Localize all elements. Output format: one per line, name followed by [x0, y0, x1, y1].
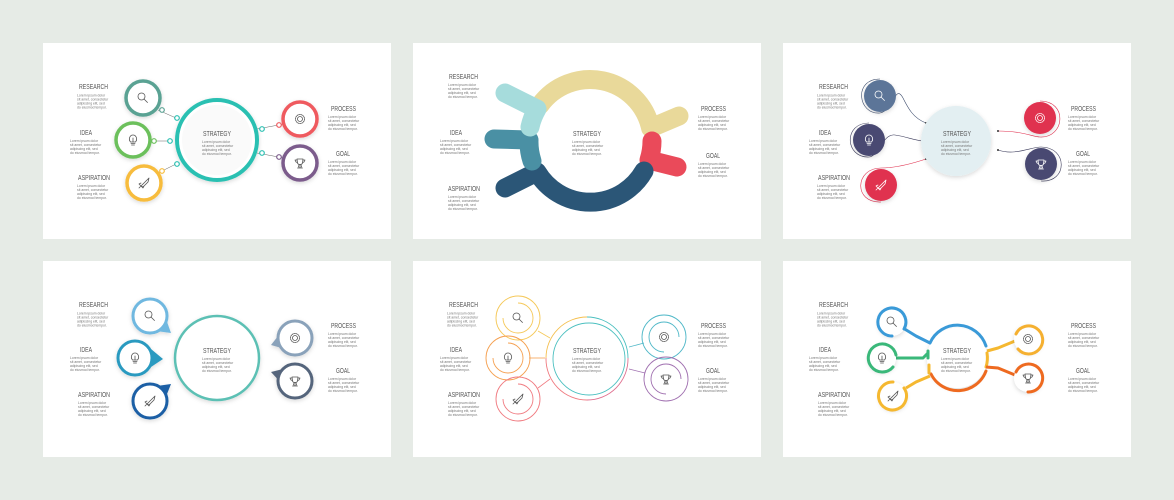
text labels: do eiusmod tempor. [328, 172, 358, 176]
text labels: adipiscing elit, sed [698, 340, 726, 344]
text labels [809, 82, 1100, 200]
text labels: ASPIRATION [78, 390, 110, 399]
text labels: sit amet, consectetur [818, 405, 850, 409]
text labels: Lorem ipsum dolor [809, 356, 838, 360]
text labels: Lorem ipsum dolor [1068, 115, 1097, 119]
text labels: Lorem ipsum dolor [1068, 332, 1097, 336]
text labels: sit amet, consectetur [328, 381, 360, 385]
text labels: Lorem ipsum dolor [77, 312, 106, 316]
text labels: GOAL [1076, 366, 1090, 375]
curved arrows [850, 79, 1061, 202]
text labels: sit amet, consectetur [817, 98, 849, 102]
text labels: sit amet, consectetur [698, 166, 730, 170]
text labels: sit amet, consectetur [70, 143, 102, 147]
text labels: do eiusmod tempor. [1068, 389, 1098, 393]
text labels: IDEA [80, 128, 92, 137]
text labels: adipiscing elit, sed [817, 102, 845, 106]
text labels: sit amet, consectetur [202, 144, 234, 148]
text labels: do eiusmod tempor. [70, 368, 100, 372]
text labels [70, 300, 360, 417]
text labels: adipiscing elit, sed [202, 365, 230, 369]
text labels: IDEA [80, 345, 92, 354]
text labels: sit amet, consectetur [941, 361, 973, 365]
pin nodes [118, 299, 312, 418]
text labels: do eiusmod tempor. [941, 369, 971, 373]
text labels: do eiusmod tempor. [328, 127, 358, 131]
text labels: Lorem ipsum dolor [77, 94, 106, 98]
text labels: adipiscing elit, sed [448, 203, 476, 207]
text labels: RESEARCH [79, 300, 108, 309]
text labels: Lorem ipsum dolor [698, 377, 727, 381]
text labels: STRATEGY [943, 346, 971, 355]
text labels: sit amet, consectetur [202, 361, 234, 365]
center circle strategy [175, 316, 259, 400]
text labels: Lorem ipsum dolor [818, 401, 847, 405]
panel: variant 3 filled circles with arrows [783, 43, 1131, 239]
text labels: RESEARCH [449, 72, 478, 81]
text labels: do eiusmod tempor. [698, 344, 728, 348]
text labels: do eiusmod tempor. [698, 174, 728, 178]
text labels: Lorem ipsum dolor [817, 94, 846, 98]
text labels: adipiscing elit, sed [440, 147, 468, 151]
text labels: Lorem ipsum dolor [328, 115, 357, 119]
text labels: adipiscing elit, sed [77, 192, 105, 196]
text labels: sit amet, consectetur [70, 360, 102, 364]
text labels: Lorem ipsum dolor [698, 332, 727, 336]
text labels [70, 82, 360, 200]
text labels [440, 300, 730, 417]
text labels: do eiusmod tempor. [809, 368, 839, 372]
text labels: ASPIRATION [818, 173, 850, 182]
text labels: adipiscing elit, sed [572, 365, 600, 369]
text labels: Lorem ipsum dolor [440, 356, 469, 360]
text labels: PROCESS [701, 321, 726, 330]
text labels: Lorem ipsum dolor [328, 160, 357, 164]
text labels: do eiusmod tempor. [1068, 172, 1098, 176]
text labels: do eiusmod tempor. [78, 413, 108, 417]
icons [878, 317, 1033, 401]
text labels: sit amet, consectetur [809, 143, 841, 147]
text labels: GOAL [336, 366, 350, 375]
text labels: adipiscing elit, sed [70, 147, 98, 151]
text labels: sit amet, consectetur [328, 336, 360, 340]
text labels: sit amet, consectetur [440, 143, 472, 147]
text labels: adipiscing elit, sed [941, 148, 969, 152]
text labels: Lorem ipsum dolor [328, 377, 357, 381]
text labels: sit amet, consectetur [448, 87, 480, 91]
text labels: adipiscing elit, sed [1068, 385, 1096, 389]
node circles [116, 81, 317, 200]
icons [131, 311, 300, 406]
text labels: adipiscing elit, sed [447, 320, 475, 324]
panel: variant 4 pin circles [43, 261, 391, 457]
text labels: sit amet, consectetur [78, 405, 110, 409]
text labels: ASPIRATION [818, 390, 850, 399]
text labels: do eiusmod tempor. [572, 369, 602, 373]
text labels: Lorem ipsum dolor [77, 184, 106, 188]
text labels: do eiusmod tempor. [698, 389, 728, 393]
text labels: adipiscing elit, sed [1068, 340, 1096, 344]
panel: variant 2 segmented ring [413, 43, 761, 239]
text labels: Lorem ipsum dolor [70, 139, 99, 143]
text labels: IDEA [450, 128, 462, 137]
text labels: sit amet, consectetur [941, 144, 973, 148]
text labels: do eiusmod tempor. [440, 151, 470, 155]
text labels: Lorem ipsum dolor [70, 356, 99, 360]
text labels: GOAL [706, 151, 720, 160]
text labels: ASPIRATION [78, 173, 110, 182]
text labels: Lorem ipsum dolor [809, 139, 838, 143]
text labels: PROCESS [331, 321, 356, 330]
text labels: Lorem ipsum dolor [202, 357, 231, 361]
text labels: do eiusmod tempor. [1068, 127, 1098, 131]
text labels: sit amet, consectetur [572, 144, 604, 148]
text labels: do eiusmod tempor. [77, 324, 107, 328]
text labels: PROCESS [1071, 321, 1096, 330]
text labels: do eiusmod tempor. [328, 344, 358, 348]
text labels: adipiscing elit, sed [941, 365, 969, 369]
panel: variant 6 colored arc network [783, 261, 1131, 457]
text labels: IDEA [819, 128, 831, 137]
text labels: sit amet, consectetur [1068, 381, 1100, 385]
text labels: sit amet, consectetur [572, 361, 604, 365]
text labels: GOAL [336, 149, 350, 158]
connectors [529, 331, 645, 388]
text labels: ASPIRATION [448, 390, 480, 399]
text labels: adipiscing elit, sed [809, 147, 837, 151]
text labels: do eiusmod tempor. [448, 95, 478, 99]
text labels: sit amet, consectetur [440, 360, 472, 364]
center circles strategy [546, 317, 628, 400]
text labels: adipiscing elit, sed [1068, 123, 1096, 127]
text labels: sit amet, consectetur [817, 316, 849, 320]
text labels [809, 300, 1100, 417]
center circle strategy [177, 100, 257, 180]
text labels: adipiscing elit, sed [328, 340, 356, 344]
icons [129, 93, 305, 188]
text labels: do eiusmod tempor. [698, 127, 728, 131]
text labels: sit amet, consectetur [1068, 119, 1100, 123]
text labels: Lorem ipsum dolor [448, 83, 477, 87]
text labels: adipiscing elit, sed [328, 168, 356, 172]
text labels: Lorem ipsum dolor [817, 184, 846, 188]
text labels: adipiscing elit, sed [698, 385, 726, 389]
icons [504, 313, 671, 404]
text labels: RESEARCH [819, 300, 848, 309]
text labels: adipiscing elit, sed [817, 320, 845, 324]
text labels: Lorem ipsum dolor [440, 139, 469, 143]
text labels: Lorem ipsum dolor [941, 140, 970, 144]
text labels: do eiusmod tempor. [818, 413, 848, 417]
text labels: adipiscing elit, sed [328, 385, 356, 389]
text labels: RESEARCH [79, 82, 108, 91]
text labels: Lorem ipsum dolor [572, 140, 601, 144]
text labels: sit amet, consectetur [77, 316, 109, 320]
text labels: do eiusmod tempor. [447, 324, 477, 328]
icons [865, 91, 1046, 190]
text labels: PROCESS [1071, 104, 1096, 113]
text labels: sit amet, consectetur [447, 316, 479, 320]
node circles [486, 296, 688, 421]
text labels: sit amet, consectetur [77, 98, 109, 102]
center circle strategy [927, 328, 987, 388]
text labels: Lorem ipsum dolor [1068, 160, 1097, 164]
text labels: Lorem ipsum dolor [448, 195, 477, 199]
text labels: adipiscing elit, sed [572, 148, 600, 152]
text labels: do eiusmod tempor. [77, 196, 107, 200]
text labels: Lorem ipsum dolor [698, 115, 727, 119]
text labels: Lorem ipsum dolor [202, 140, 231, 144]
text labels: sit amet, consectetur [698, 119, 730, 123]
ring segments [494, 80, 679, 202]
text labels: do eiusmod tempor. [1068, 344, 1098, 348]
text labels: GOAL [706, 366, 720, 375]
text labels: sit amet, consectetur [1068, 164, 1100, 168]
text labels: do eiusmod tempor. [440, 368, 470, 372]
text labels: adipiscing elit, sed [448, 409, 476, 413]
text labels: IDEA [450, 345, 462, 354]
text labels: adipiscing elit, sed [202, 148, 230, 152]
text labels: Lorem ipsum dolor [572, 357, 601, 361]
text labels: do eiusmod tempor. [202, 369, 232, 373]
connector dots [152, 108, 281, 173]
text labels: Lorem ipsum dolor [78, 401, 107, 405]
text labels: STRATEGY [203, 346, 231, 355]
text labels: Lorem ipsum dolor [447, 312, 476, 316]
text labels: do eiusmod tempor. [328, 389, 358, 393]
text labels: PROCESS [331, 104, 356, 113]
text labels: adipiscing elit, sed [440, 364, 468, 368]
text labels: adipiscing elit, sed [78, 409, 106, 413]
text labels: do eiusmod tempor. [448, 413, 478, 417]
text labels: adipiscing elit, sed [448, 91, 476, 95]
text labels: do eiusmod tempor. [941, 152, 971, 156]
text labels: do eiusmod tempor. [448, 207, 478, 211]
text labels: sit amet, consectetur [328, 164, 360, 168]
text labels: adipiscing elit, sed [1068, 168, 1096, 172]
text labels: RESEARCH [819, 82, 848, 91]
text labels: sit amet, consectetur [1068, 336, 1100, 340]
text labels: Lorem ipsum dolor [448, 401, 477, 405]
text labels: sit amet, consectetur [328, 119, 360, 123]
text labels: sit amet, consectetur [698, 336, 730, 340]
text labels: sit amet, consectetur [698, 381, 730, 385]
text labels: do eiusmod tempor. [77, 106, 107, 110]
text labels: sit amet, consectetur [77, 188, 109, 192]
text labels: sit amet, consectetur [817, 188, 849, 192]
text labels: ASPIRATION [448, 184, 480, 193]
connectors [896, 328, 1015, 388]
text labels: sit amet, consectetur [809, 360, 841, 364]
text labels: adipiscing elit, sed [698, 170, 726, 174]
text labels: RESEARCH [449, 300, 478, 309]
text labels: adipiscing elit, sed [809, 364, 837, 368]
text labels: Lorem ipsum dolor [698, 162, 727, 166]
text labels: do eiusmod tempor. [202, 152, 232, 156]
text labels: do eiusmod tempor. [817, 106, 847, 110]
text labels: sit amet, consectetur [448, 199, 480, 203]
text labels: PROCESS [701, 104, 726, 113]
center circle strategy [921, 106, 991, 176]
text labels: adipiscing elit, sed [77, 102, 105, 106]
text labels: GOAL [1076, 149, 1090, 158]
text labels: adipiscing elit, sed [328, 123, 356, 127]
text labels: do eiusmod tempor. [817, 324, 847, 328]
text labels: STRATEGY [573, 129, 601, 138]
text labels: adipiscing elit, sed [817, 192, 845, 196]
panel: variant 5 outline double circles [413, 261, 761, 457]
text labels: adipiscing elit, sed [818, 409, 846, 413]
text labels: STRATEGY [943, 129, 971, 138]
text labels: adipiscing elit, sed [77, 320, 105, 324]
text labels: do eiusmod tempor. [817, 196, 847, 200]
text labels: sit amet, consectetur [448, 405, 480, 409]
text labels: do eiusmod tempor. [809, 151, 839, 155]
text labels [440, 72, 730, 211]
text labels: do eiusmod tempor. [572, 152, 602, 156]
filled node circles [853, 80, 1057, 201]
text labels: Lorem ipsum dolor [817, 312, 846, 316]
text labels: adipiscing elit, sed [698, 123, 726, 127]
text labels: IDEA [819, 345, 831, 354]
node circles [868, 308, 1043, 410]
text labels: Lorem ipsum dolor [1068, 377, 1097, 381]
text labels: Lorem ipsum dolor [941, 357, 970, 361]
text labels: adipiscing elit, sed [70, 364, 98, 368]
text labels: STRATEGY [203, 129, 231, 138]
panel: variant 1 connected circles [43, 43, 391, 239]
text labels: STRATEGY [573, 346, 601, 355]
text labels: Lorem ipsum dolor [328, 332, 357, 336]
connectors [151, 110, 284, 173]
text labels: do eiusmod tempor. [70, 151, 100, 155]
